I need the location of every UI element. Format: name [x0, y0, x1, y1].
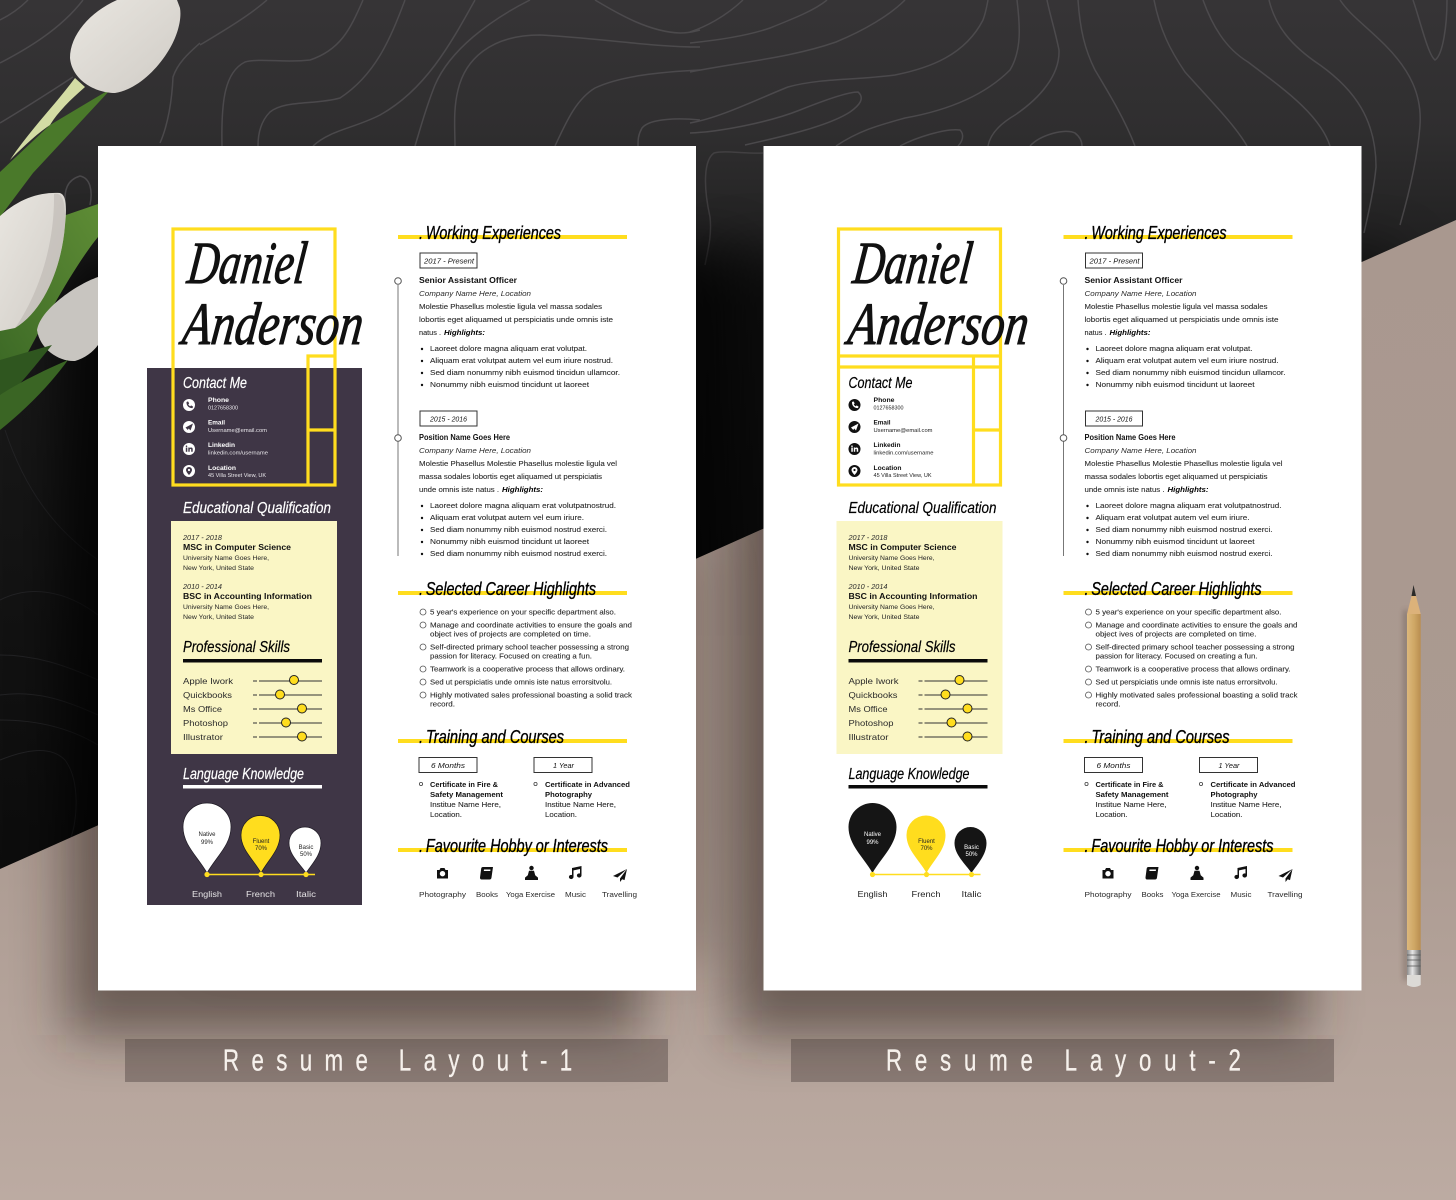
contact list: Username@email.com	[874, 428, 932, 434]
section: career highlights: Sed ut perspiciatis unde omnis iste natus errorsitvolu.	[1096, 678, 1278, 686]
background: dark vignette around pages	[46, 224, 1374, 838]
caption banner: layout 2	[791, 1039, 1334, 1082]
section: working experiences: Sed diam nonummy nibh euismod tincidun ullamcor.	[430, 368, 620, 377]
skill sliders: Illustrator	[848, 732, 889, 742]
education entries	[182, 533, 312, 621]
section: career highlights: Highly motivated sales professional boasting a solid track	[1096, 690, 1298, 700]
section: hobbies: . Favourite Hobby or Interests	[419, 836, 608, 856]
name: layout 1: Daniel	[184, 230, 310, 297]
name: layout 1: Anderson	[176, 291, 367, 358]
section: career highlights: Highly motivated sales professional boasting a solid track	[430, 690, 632, 700]
section: career highlights: object ives of projects are completed on time.	[1096, 630, 1256, 638]
section: working experiences: Nonummy nibh euismod tincidunt ut laoreet	[430, 380, 590, 389]
section: working experiences: Sed diam nonummy nibh euismod tincidun ullamcor.	[1096, 368, 1286, 377]
section: working experiences: lobortis eget aliquamed ut perspiciatis unde omnis iste	[419, 315, 613, 324]
education entries: New York, United State	[848, 614, 920, 621]
language pins chart: 70%	[920, 846, 933, 852]
background: dark textured surface	[0, 0, 1456, 880]
section: working experiences: Company Name Here, Location	[419, 289, 531, 298]
skill sliders: Ms Office	[848, 704, 888, 714]
section: working experiences	[1060, 223, 1292, 558]
education entries: New York, United State	[183, 565, 255, 572]
section: training and courses: 6 Months	[1096, 761, 1131, 770]
education heading: Educational Qualification	[848, 500, 997, 517]
section: career highlights: Sed ut perspiciatis unde omnis iste natus errorsitvolu.	[430, 678, 612, 686]
language pins chart: Basic	[964, 845, 979, 851]
section: working experiences: Molestie Phasellus Molestie Phasellus molestie ligula vel	[419, 459, 617, 468]
section: career highlights: passion for literacy. Focused on creating a fun.	[430, 652, 592, 660]
section: training and courses: Location.	[545, 810, 577, 819]
contact list: Email	[208, 420, 225, 426]
section: working experiences: Sed diam nonummy nibh euismod nostrud exerci.	[430, 549, 607, 558]
section: working experiences: 2017 - Present	[1088, 256, 1140, 266]
language pins chart: Italic	[962, 889, 982, 899]
section: hobbies: Travelling	[1268, 890, 1302, 899]
section: training and courses: Certificate in Advanced	[545, 780, 630, 789]
name: layout 2	[842, 230, 1033, 358]
education entries: 2010 - 2014	[182, 582, 222, 591]
name: layout 2: Daniel	[849, 230, 976, 297]
section: career highlights: . Selected Career Highlights	[419, 579, 596, 599]
language pins chart	[848, 803, 986, 899]
skill sliders: Illustrator	[183, 732, 223, 742]
section: training and courses: Certificate in Fire &	[430, 780, 499, 789]
section: working experiences: Sed diam nonummy nibh euismod nostrud exerci.	[430, 525, 607, 534]
section: working experiences: Position Name Goes Here	[419, 433, 511, 442]
section: training and courses: Institue Name Here,	[430, 800, 501, 809]
contact list: Email	[874, 420, 891, 426]
section: working experiences: Highlights:	[444, 328, 485, 337]
contact list: linkedin.com/username	[208, 450, 268, 456]
section: working experiences	[395, 223, 627, 558]
sidebar panel: layout 1	[147, 229, 367, 905]
contact heading: Contact Me	[848, 375, 913, 392]
education entries: BSC in Accounting Information	[183, 592, 312, 601]
section: training and courses: Certificate in Fire &	[1096, 780, 1164, 789]
language pins chart: 50%	[300, 852, 313, 858]
section: working experiences: 2015 - 2016	[429, 414, 468, 424]
icon: books	[480, 867, 493, 880]
caption banner: layout 1: Resume Layout-1	[223, 1043, 572, 1077]
education entries: New York, United State	[183, 614, 255, 621]
contact list: 45 Villa Street View, UK	[874, 473, 932, 479]
language pins chart: English	[858, 889, 888, 899]
skill sliders: Quickbooks	[183, 690, 232, 700]
education and skills panel	[171, 521, 337, 754]
skills heading	[183, 639, 322, 662]
name: layout 2: Anderson	[842, 291, 1033, 358]
section: working experiences: massa sodales lobortis eget aliquamed ut perspiciatis	[1084, 472, 1268, 481]
section: working experiences: Laoreet dolore magna aliquam erat volutpat.	[430, 344, 587, 353]
background: page shadows on tan	[32, 529, 1341, 1068]
caption banner: layout 1	[125, 1039, 668, 1082]
section: working experiences: lobortis eget aliquamed ut perspiciatis unde omnis iste	[1084, 315, 1278, 324]
education heading: Educational Qualification	[183, 500, 331, 517]
section: hobbies: Books	[476, 890, 498, 899]
section: training and courses	[1064, 727, 1296, 819]
section: hobbies: Music	[1230, 890, 1252, 899]
section: working experiences: . Working Experiences	[1084, 223, 1226, 243]
section: working experiences: Senior Assistant Officer	[1084, 276, 1182, 285]
language heading: Language Knowledge	[848, 766, 970, 783]
section: working experiences: Molestie Phasellus molestie ligula vel massa sodales	[1084, 302, 1268, 311]
decoration: white tulips	[0, 0, 180, 430]
section: training and courses: Safety Management	[430, 790, 504, 799]
language pins chart: French	[246, 889, 275, 899]
contact list: Linkedin	[874, 442, 901, 449]
section: training and courses: 1 Year	[1218, 761, 1240, 770]
education entries: MSC in Computer Science	[183, 543, 292, 552]
icon: books	[1146, 867, 1158, 880]
section: career highlights: passion for literacy. Focused on creating a fun.	[1096, 652, 1258, 660]
icon: yoga	[1190, 866, 1204, 880]
section: hobbies	[398, 836, 637, 899]
education entries: MSC in Computer Science	[848, 543, 957, 552]
language heading	[848, 766, 988, 788]
skill sliders: Ms Office	[183, 704, 222, 714]
contact heading: Contact Me	[183, 375, 247, 392]
section: career highlights: Self-directed primary school teacher possessing a strong	[1096, 642, 1294, 652]
contact list: Linkedin	[208, 442, 235, 449]
contact list	[183, 397, 268, 479]
section: hobbies: . Favourite Hobby or Interests	[1084, 836, 1274, 856]
section: hobbies: Books	[1142, 890, 1164, 899]
education and skills panel	[836, 521, 1002, 754]
section: career highlights	[398, 579, 632, 708]
education entries: 2017 - 2018	[182, 533, 223, 542]
section: working experiences: Aliquam erat volutpat autem vel eum iriure nostrud.	[1096, 356, 1278, 365]
section: training and courses: Photography	[1210, 790, 1258, 799]
section: career highlights: record.	[430, 700, 455, 708]
icon: music	[569, 866, 582, 879]
section: training and courses: Institue Name Here,	[545, 800, 616, 809]
skill sliders: Photoshop	[848, 718, 894, 728]
icon: yoga	[525, 866, 538, 880]
section: training and courses: Location.	[1096, 810, 1128, 819]
section: working experiences: Laoreet dolore magna aliquam erat volutpatnostrud.	[430, 501, 616, 510]
language heading	[183, 766, 322, 788]
section: working experiences: Highlights:	[502, 485, 543, 494]
section: hobbies: Travelling	[602, 890, 637, 899]
section: working experiences: Nonummy nibh euismod tincidunt ut laoreet	[430, 537, 590, 546]
language pins chart: English	[192, 889, 222, 899]
language heading: Language Knowledge	[183, 766, 304, 783]
contact list: Phone	[208, 397, 229, 404]
section: training and courses: 6 Months	[431, 761, 465, 770]
education entries: University Name Goes Here,	[848, 555, 935, 562]
yellow frame: layout 2	[838, 229, 1000, 485]
page: resume layout 2	[764, 146, 1362, 990]
section: career highlights: Manage and coordinate activities to ensure the goals and	[1096, 620, 1298, 630]
skill sliders: Apple Iwork	[848, 676, 899, 686]
section: hobbies: Photography	[419, 890, 466, 899]
section: working experiences: natus .	[1084, 328, 1106, 337]
sidebar: layout 2	[836, 229, 1033, 899]
education entries	[848, 533, 978, 621]
section: working experiences: Company Name Here, Location	[1084, 446, 1196, 455]
skill sliders: Photoshop	[183, 718, 228, 728]
language pins chart: Italic	[296, 889, 317, 899]
yellow frame: layout 1	[173, 229, 335, 485]
skill sliders	[848, 676, 988, 742]
skills heading: Professional Skills	[848, 639, 956, 656]
section: career highlights	[1064, 579, 1298, 708]
page: resume layout 1	[98, 146, 696, 990]
section: training and courses: Institue Name Here,	[1096, 800, 1166, 809]
section: working experiences: Senior Assistant Officer	[419, 276, 517, 285]
contact list: linkedin.com/username	[874, 450, 934, 456]
contact list: 45 Villa Street View, UK	[208, 473, 267, 479]
section: training and courses	[398, 727, 630, 819]
contact list: Phone	[874, 397, 895, 404]
language pins chart: Fluent	[253, 839, 270, 845]
education entries: University Name Goes Here,	[183, 604, 269, 611]
contact list: Location	[874, 465, 902, 472]
section: training and courses: . Training and Courses	[1084, 727, 1230, 747]
section: working experiences: unde omnis iste natus .	[419, 485, 499, 494]
section: working experiences: Highlights:	[1168, 485, 1209, 494]
section: training and courses: . Training and Courses	[419, 727, 564, 747]
icon: camera	[1102, 868, 1114, 878]
icon: music	[1234, 866, 1247, 879]
section: working experiences: Aliquam erat volutpat autem vel eum iriure nostrud.	[430, 356, 613, 365]
section: training and courses: Certificate in Advanced	[1210, 780, 1296, 789]
skill sliders: Quickbooks	[848, 690, 898, 700]
section: training and courses: 1 Year	[553, 761, 574, 770]
icon: paper plane	[1278, 869, 1292, 882]
section: working experiences: massa sodales lobortis eget aliquamed ut perspiciatis	[419, 472, 602, 481]
education entries: University Name Goes Here,	[848, 604, 935, 611]
section: working experiences: Company Name Here, Location	[1084, 289, 1196, 298]
section: working experiences: Aliquam erat volutpat autem vel eum iriure.	[430, 513, 584, 522]
language pins chart: Native	[198, 832, 216, 838]
skill sliders	[183, 676, 322, 742]
section: career highlights: Self-directed primary school teacher possessing a strong	[430, 642, 629, 652]
contact list	[848, 397, 934, 479]
section: career highlights: 5 year's experience on your specific department also.	[430, 608, 616, 616]
section: working experiences: Sed diam nonummy nibh euismod nostrud exerci.	[1096, 549, 1272, 558]
section: training and courses: Photography	[545, 790, 593, 799]
section: working experiences: natus .	[419, 328, 441, 337]
skills heading	[848, 639, 988, 662]
background: dim lower contours	[0, 430, 84, 838]
section: training and courses: Location.	[430, 810, 462, 819]
section: working experiences: Laoreet dolore magna aliquam erat volutpat.	[1096, 344, 1252, 353]
section: career highlights: 5 year's experience on your specific department also.	[1096, 608, 1282, 616]
language pins chart: 70%	[255, 846, 268, 852]
icon: paper plane	[613, 869, 627, 882]
section: training and courses: Safety Management	[1096, 790, 1169, 799]
education entries: University Name Goes Here,	[183, 555, 269, 562]
contact list: 0127658300	[874, 406, 904, 412]
section: working experiences: Molestie Phasellus molestie ligula vel massa sodales	[419, 302, 602, 311]
name: layout 1	[176, 230, 367, 358]
section: working experiences: . Working Experiences	[419, 223, 561, 243]
language pins chart: French	[912, 889, 941, 899]
section: career highlights: Manage and coordinate activities to ensure the goals and	[430, 620, 632, 630]
contact list: Location	[208, 465, 236, 472]
education entries: BSC in Accounting Information	[848, 592, 978, 601]
section: career highlights: record.	[1096, 700, 1120, 708]
language pins chart	[183, 803, 321, 899]
contact list: 0127658300	[208, 406, 238, 412]
section: working experiences: Position Name Goes Here	[1084, 433, 1176, 442]
education entries: 2010 - 2014	[848, 582, 888, 591]
section: career highlights: . Selected Career Highlights	[1084, 579, 1262, 599]
section: career highlights: Teamwork is a cooperative process that allows ordinary.	[1096, 664, 1290, 674]
section: training and courses: Institue Name Here,	[1210, 800, 1282, 809]
background: contour lines	[0, 0, 1447, 265]
icon: camera	[437, 868, 448, 878]
contact list: Username@email.com	[208, 428, 267, 434]
section: career highlights: object ives of projects are completed on time.	[430, 630, 591, 638]
section: working experiences: Company Name Here, Location	[419, 446, 531, 455]
education entries: 2017 - 2018	[848, 533, 888, 542]
main column: layout 2	[1060, 223, 1302, 899]
section: hobbies	[1064, 836, 1302, 899]
skill sliders: Apple Iwork	[183, 676, 234, 686]
section: working experiences: Sed diam nonummy nibh euismod nostrud exerci.	[1096, 525, 1272, 534]
section: hobbies: Photography	[1084, 890, 1132, 899]
section: working experiences: Aliquam erat volutpat autem vel eum iriure.	[1096, 513, 1250, 522]
language pins chart: 50%	[965, 852, 978, 858]
section: working experiences: Nonummy nibh euismod tincidunt ut laoreet	[1096, 537, 1255, 546]
section: working experiences: Molestie Phasellus Molestie Phasellus molestie ligula vel	[1084, 459, 1283, 468]
language pins chart: Basic	[299, 845, 313, 851]
section: working experiences: Highlights:	[1110, 328, 1151, 337]
language pins chart: Native	[864, 832, 882, 838]
section: working experiences: 2015 - 2016	[1095, 414, 1133, 424]
section: working experiences: Nonummy nibh euismod tincidunt ut laoreet	[1096, 380, 1255, 389]
education entries: New York, United State	[848, 565, 920, 572]
skills heading: Professional Skills	[183, 639, 290, 656]
language pins chart: Fluent	[918, 839, 935, 845]
section: hobbies: Yoga Exercise	[1172, 890, 1220, 899]
section: training and courses: Location.	[1210, 810, 1243, 819]
section: working experiences: unde omnis iste natus .	[1084, 485, 1164, 494]
section: working experiences: 2017 - Present	[423, 256, 475, 266]
section: hobbies: Yoga Exercise	[506, 890, 555, 899]
section: working experiences: Laoreet dolore magna aliquam erat volutpatnostrud.	[1096, 501, 1282, 510]
section: career highlights: Teamwork is a cooperative process that allows ordinary.	[430, 664, 625, 674]
section: hobbies: Music	[565, 890, 586, 899]
main column: layout 1	[395, 223, 637, 899]
language pins chart: 99%	[201, 840, 214, 846]
language pins chart: 99%	[866, 840, 879, 846]
caption banner: layout 2: Resume Layout-2	[886, 1043, 1241, 1077]
decoration: pencil	[1404, 585, 1421, 987]
